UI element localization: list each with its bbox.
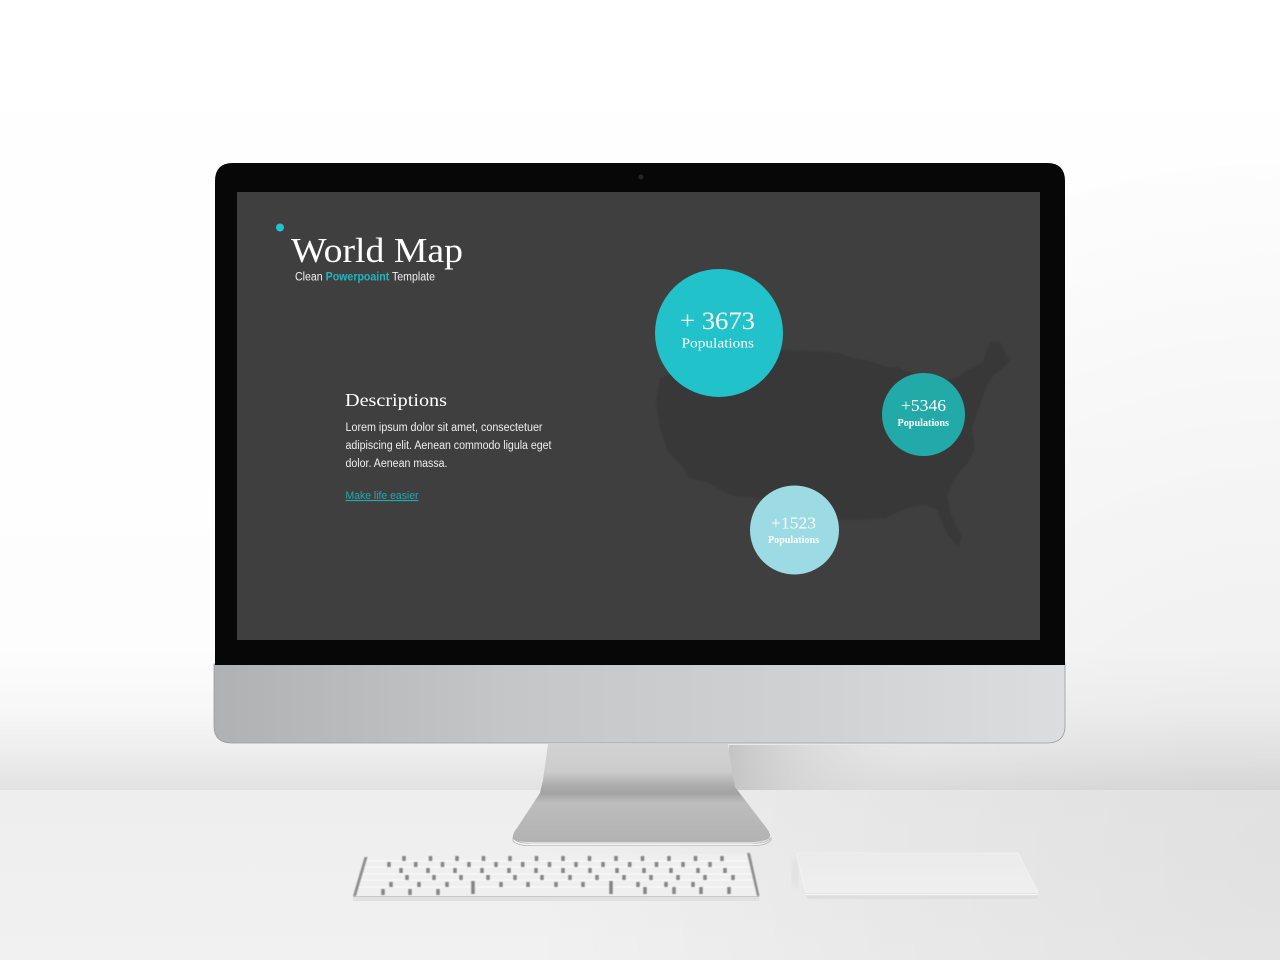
desk surface bbox=[0, 790, 1280, 960]
description line 3: dolor. Aenean massa. bbox=[346, 458, 448, 470]
black bezel bbox=[215, 163, 1065, 665]
shadow behind stand bbox=[729, 745, 929, 790]
accent dot bbox=[276, 224, 284, 232]
webcam bbox=[638, 174, 644, 180]
monitor stand bbox=[513, 744, 771, 846]
monitor body bbox=[214, 163, 1065, 743]
bubble: 3673 populations: + 3673 bbox=[680, 308, 755, 335]
bubble: 1523 populations: Populations bbox=[768, 535, 819, 546]
link: Make life easier bbox=[346, 490, 419, 502]
description block bbox=[345, 390, 552, 502]
title: World Map bbox=[291, 231, 463, 270]
bubble: 3673 populations bbox=[655, 269, 783, 397]
slide content bbox=[276, 224, 965, 574]
trackpad bbox=[793, 853, 1038, 899]
keyboard bbox=[353, 853, 760, 901]
bubble: 3673 populations: Populations bbox=[682, 336, 754, 352]
map of the United States bbox=[656, 342, 1010, 546]
bubble: 5346 populations bbox=[882, 373, 965, 456]
keyboard side edges and key gaps bbox=[353, 853, 760, 896]
bubble: 5346 populations: Populations bbox=[898, 418, 949, 429]
monitor chin bbox=[214, 664, 1065, 743]
description heading: Descriptions bbox=[345, 390, 447, 410]
subtitle: Clean Powerpoaint Template bbox=[295, 272, 435, 284]
bubble: 5346 populations: +5346 bbox=[901, 396, 946, 415]
slide screen bbox=[237, 192, 1040, 640]
bubble: 1523 populations bbox=[750, 486, 839, 574]
description line 2: adipiscing elit. Aenean commodo ligula eget bbox=[346, 440, 552, 452]
description line 1: Lorem ipsum dolor sit amet, consectetuer bbox=[346, 422, 543, 434]
bubble: 1523 populations: +1523 bbox=[771, 514, 816, 532]
